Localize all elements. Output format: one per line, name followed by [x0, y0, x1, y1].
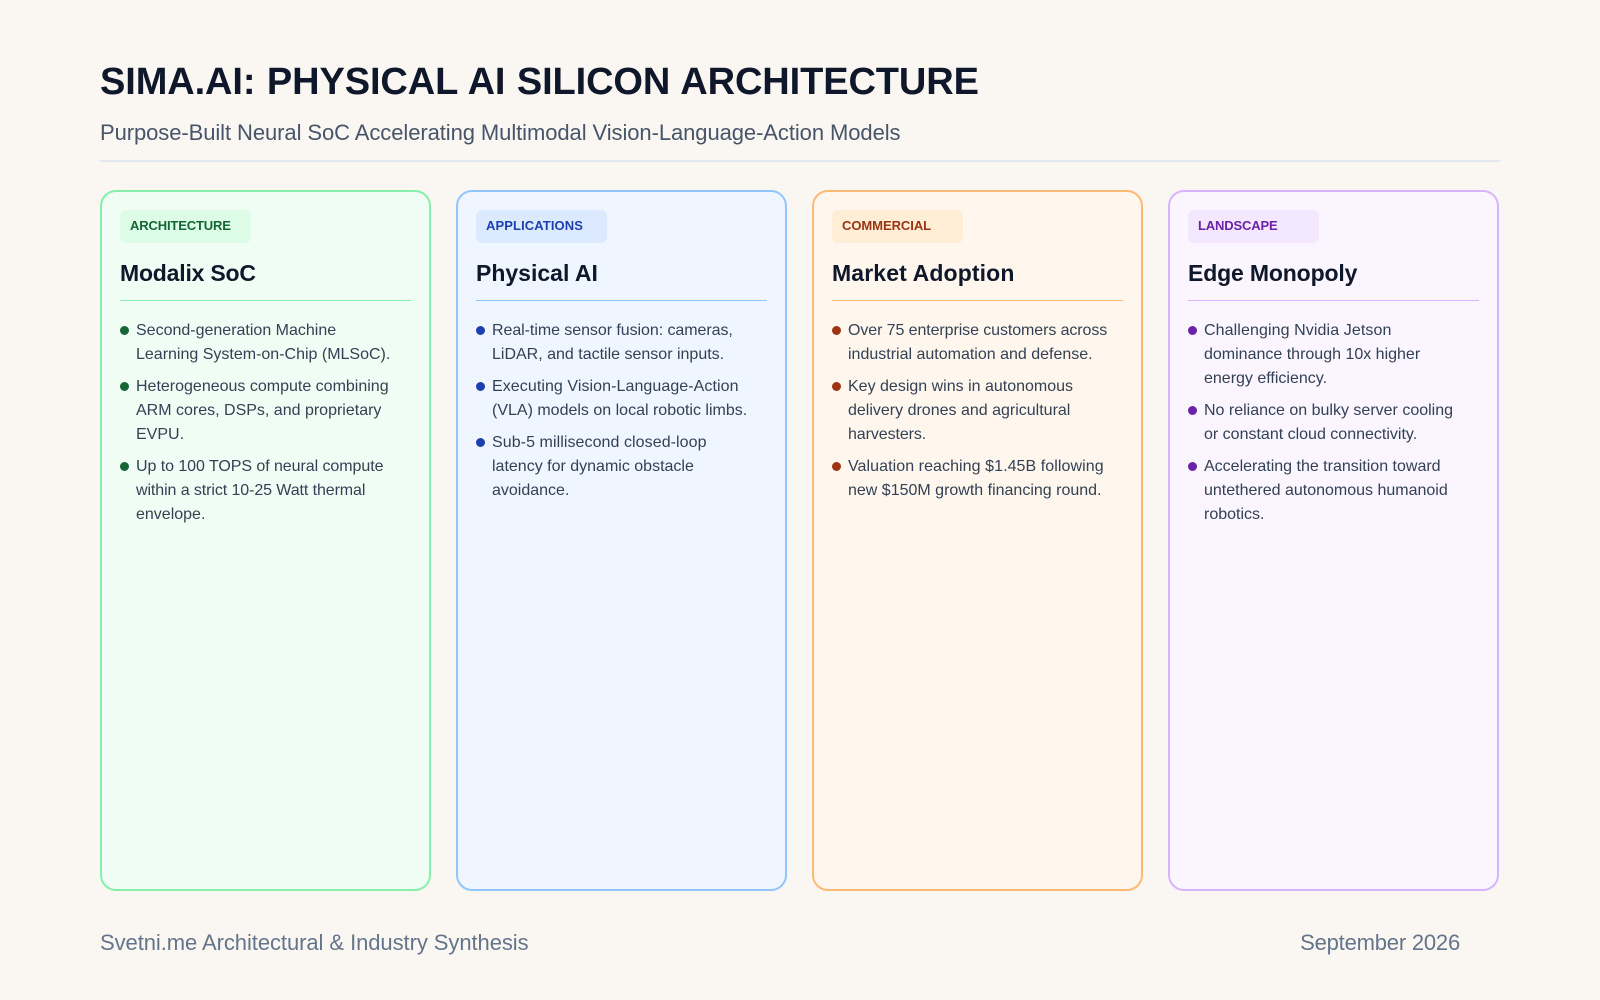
bullet: MLSoC: Learning System-on-Chip (MLSoC). — [136, 346, 390, 363]
tag: landscape — [1188, 210, 1319, 243]
bullet: 100 TOPS — [120, 458, 383, 523]
bullet: latency: latency for dynamic obstacle — [492, 458, 694, 475]
bullet: valuation: Valuation reaching $1.45B following — [848, 458, 1104, 475]
bullet: design wins — [832, 378, 1073, 443]
tag: commercial: COMMERCIAL — [842, 218, 931, 233]
bullet: MLSoC — [120, 322, 390, 363]
bullet: valuation: new $150M growth financing round. — [848, 482, 1102, 499]
bullet: heterogeneous compute: Heterogeneous compute combining — [136, 378, 389, 395]
bullet: latency — [476, 434, 707, 499]
bullet list: applications — [476, 322, 747, 499]
bullet: VLA models: Executing Vision-Language-Action — [492, 378, 739, 395]
bullet list: commercial — [832, 322, 1107, 499]
tag: applications — [476, 210, 607, 243]
bullet: design wins: delivery drones and agricultural — [848, 402, 1070, 419]
subtitle: Purpose-Built Neural SoC Accelerating Multimodal Vision-Language-Action Models — [100, 120, 900, 145]
heading: Modalix SoC: Modalix SoC — [120, 260, 256, 286]
footer: date: September 2026 — [1300, 930, 1460, 955]
bullet: humanoid robotics: robotics. — [1204, 506, 1264, 523]
bullet: customers — [832, 322, 1107, 363]
bullet: no reliance: No reliance on bulky server cooling — [1204, 402, 1453, 419]
bullet list: landscape — [1188, 322, 1453, 523]
bullet: VLA models: (VLA) models on local robotic limbs. — [492, 402, 747, 419]
footer: source: Svetni.me Architectural & Industry Synthesis — [100, 930, 529, 955]
panel: landscape — [1168, 190, 1499, 891]
heading: Market Adoption: Market Adoption — [832, 260, 1015, 286]
bullet: sensor fusion — [476, 322, 733, 363]
bullet: no reliance: or constant cloud connectivity. — [1204, 426, 1417, 443]
panel: architecture — [100, 190, 431, 891]
bullet: 100 TOPS: within a strict 10-25 Watt thermal — [136, 482, 365, 499]
tag: applications: APPLICATIONS — [486, 218, 583, 233]
bullet: 100 TOPS: envelope. — [136, 506, 205, 523]
bullet: heterogeneous compute: ARM cores, DSPs, and proprietary — [136, 402, 381, 419]
bullet: Nvidia Jetson: Challenging Nvidia Jetson — [1204, 322, 1392, 339]
bullet: design wins: harvesters. — [848, 426, 926, 443]
bullet list: architecture — [120, 322, 390, 523]
bullet: Nvidia Jetson: energy efficiency. — [1204, 370, 1327, 387]
bullet: design wins: Key design wins in autonomous — [848, 378, 1073, 395]
tag: architecture — [120, 210, 251, 243]
bullet: MLSoC: Second-generation Machine — [136, 322, 336, 339]
panel: applications — [456, 190, 787, 891]
bullet: 100 TOPS: Up to 100 TOPS of neural compute — [136, 458, 383, 475]
bullet: no reliance — [1188, 402, 1453, 443]
bullet: latency: avoidance. — [492, 482, 569, 499]
bullet: humanoid robotics: Accelerating the transition toward — [1204, 458, 1441, 475]
bullet: customers: industrial automation and defense. — [848, 346, 1093, 363]
panel: commercial — [812, 190, 1143, 891]
heading: Edge Monopoly: Edge Monopoly — [1188, 260, 1357, 286]
tag: architecture: ARCHITECTURE — [130, 218, 231, 233]
bullet: humanoid robotics — [1188, 458, 1448, 523]
tag: landscape: LANDSCAPE — [1198, 218, 1278, 233]
bullet: heterogeneous compute — [120, 378, 389, 443]
bullet: heterogeneous compute: EVPU. — [136, 426, 184, 443]
bullet: sensor fusion: LiDAR, and tactile sensor inputs. — [492, 346, 724, 363]
bullet: sensor fusion: Real-time sensor fusion: cameras, — [492, 322, 733, 339]
heading: Physical AI: Physical AI — [476, 260, 598, 286]
bullet: customers: Over 75 enterprise customers across — [848, 322, 1107, 339]
title: SIMA.AI: PHYSICAL AI SILICON ARCHITECTURE — [100, 61, 979, 103]
bullet: latency: Sub-5 millisecond closed-loop — [492, 434, 707, 451]
tag: commercial — [832, 210, 963, 243]
bullet: Nvidia Jetson — [1188, 322, 1420, 387]
bullet: Nvidia Jetson: dominance through 10x higher — [1204, 346, 1420, 363]
bullet: valuation — [832, 458, 1104, 499]
bullet: VLA models — [476, 378, 747, 419]
bullet: humanoid robotics: untethered autonomous humanoid — [1204, 482, 1448, 499]
